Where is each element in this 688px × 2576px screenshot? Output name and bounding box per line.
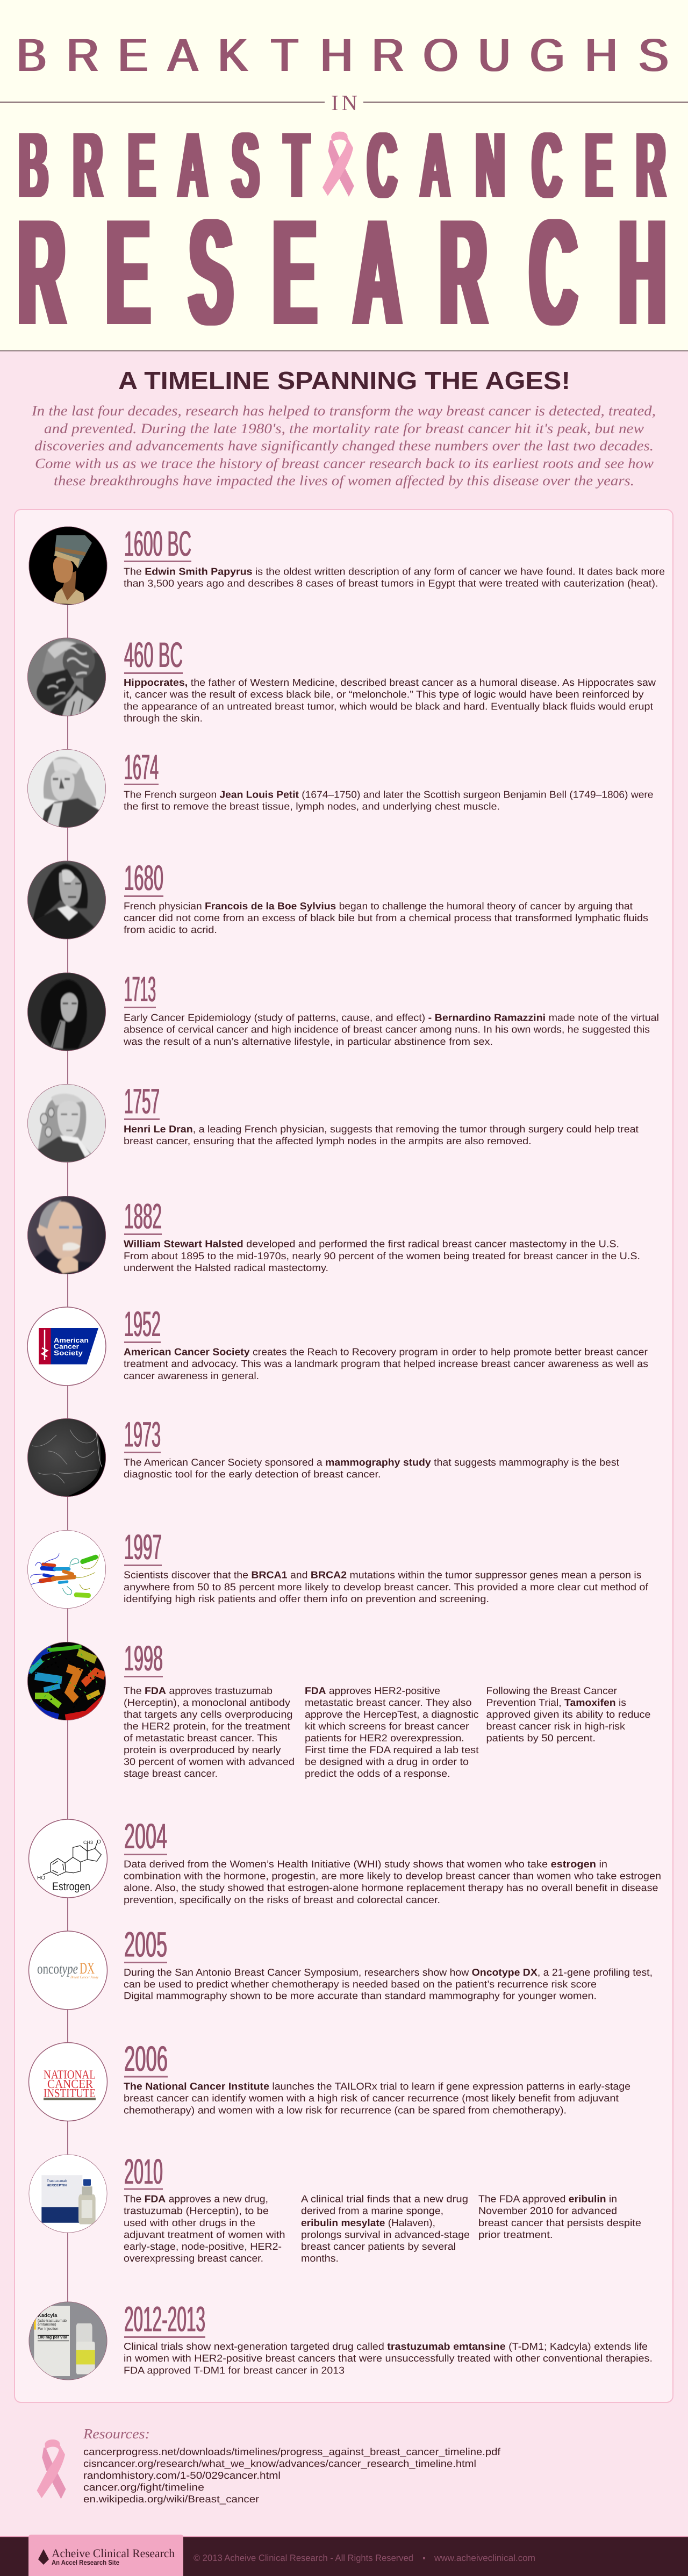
molecule labels: CH3 — [83, 1840, 93, 1845]
text column 1: The FDA approves trastuzumab — [124, 1685, 273, 1696]
underline — [124, 672, 183, 674]
entry: 1997 — [27, 1527, 649, 1609]
text column 3: The FDA approved eribulin in — [478, 2193, 617, 2205]
entry: 1757: 1757 — [124, 1081, 160, 1121]
bullet — [423, 2557, 425, 2559]
text column 3 — [486, 1685, 650, 1743]
box label: Trastuzumab — [47, 2179, 67, 2183]
text block — [124, 788, 654, 812]
text column 3: approved given its ability to reduce — [486, 1709, 650, 1720]
entry: 2012-2013: 2012-2013 — [124, 2299, 205, 2339]
timeline connector line — [67, 605, 68, 2302]
icon: American Cancer Society logo: Cancer — [54, 1343, 79, 1350]
text block: from acidic to acrid. — [124, 924, 217, 935]
text block: The Edwin Smith Papyrus is the oldest written description of any form of cancer we have found. It dates back more — [124, 565, 665, 577]
underline — [124, 1233, 162, 1235]
text block: French physician Francois de la Boe Sylvius began to challenge the humoral theory of cancer by arguing that — [124, 900, 633, 912]
text column 2: eribulin mesylate (Halaven), — [301, 2217, 435, 2228]
icon: National Cancer Institute logo: CANCER — [47, 2077, 94, 2091]
entry: 1674 — [27, 747, 654, 830]
entry: 1973 — [27, 1415, 619, 1497]
text column 2: metastatic breast cancer. They also — [305, 1697, 472, 1708]
text block — [124, 2341, 653, 2376]
entry: 2012-2013 — [28, 2299, 653, 2381]
icon: Jean Louis Petit portrait — [27, 749, 106, 830]
box label: For Injection — [38, 2327, 59, 2331]
icon: Bernardino Ramazzini portrait — [27, 972, 106, 1051]
icon: National Cancer Institute logo: INSTITUTE — [44, 2086, 96, 2100]
panel: timeline — [15, 510, 673, 2402]
text column 1: early-stage, node-positive, HER2- — [124, 2241, 282, 2252]
icon: Francois de la Boe Sylvius portrait — [27, 860, 106, 943]
text column 1: protein is overproduced by nearly — [124, 1744, 281, 1755]
icon: National Cancer Institute logo: NATIONAL — [44, 2068, 96, 2081]
text column 1 — [124, 2193, 285, 2264]
icon: HER2 molecular model — [27, 1641, 106, 1721]
text column 1: adjuvant treatment of women with — [124, 2229, 285, 2240]
text column 2: breast cancer patients by several — [301, 2241, 456, 2252]
entry: 1997: 1997 — [124, 1527, 162, 1567]
text column 2: FDA approves HER2-positive — [305, 1685, 440, 1696]
underline — [124, 1341, 161, 1343]
text block — [124, 1123, 639, 1146]
underline — [124, 1962, 167, 1963]
entry: 1757 — [27, 1081, 639, 1163]
text column 2: prolongs survival in advanced-stage — [301, 2229, 470, 2240]
icon: mammogram — [27, 1418, 108, 1497]
text block — [124, 1456, 619, 1480]
text block — [123, 1011, 659, 1047]
icon: pink ribbon in title — [322, 132, 354, 197]
text column 1: overexpressing breast cancer. — [124, 2252, 263, 2264]
icon: Oncotype DX logo: oncotype — [37, 1961, 78, 1977]
text block: During the San Antonio Breast Cancer Symposium, researchers show how Oncotype DX , a 21-gene profiling test, — [124, 1967, 653, 1978]
resource links: en.wikipedia.org/wiki/Breast_cancer — [83, 2493, 259, 2505]
text column 3: Following the Breast Cancer — [486, 1685, 617, 1696]
text block — [124, 1967, 653, 2001]
text block: was the result of a nun’s alternative lifestyle, in particular abstinence from sex. — [123, 1036, 493, 1047]
text block: American Cancer Society creates the Reach to Recovery program in order to help promote better breast cancer — [124, 1346, 648, 1358]
intro paragraph: In the last four decades, research has helped to transform the way breast cancer is detected, treated, — [31, 403, 656, 419]
entry: 1600 BC — [28, 523, 665, 605]
title: in, with rule lines: IN — [331, 90, 357, 115]
box label: HERCEPTIN — [47, 2184, 67, 2187]
text block: The American Cancer Society sponsored a mammography study that suggests mammography is the best — [124, 1456, 619, 1468]
text block: underwent the Halsted radical mastectomy. — [124, 1262, 328, 1273]
text block — [124, 565, 665, 589]
icon: Henri Le Dran portrait — [27, 1084, 106, 1163]
text block — [124, 1569, 649, 1604]
text column 1: 30 percent of women with advanced — [124, 1756, 295, 1767]
text column 2: predict the odds of a response. — [305, 1768, 450, 1779]
intro paragraph — [31, 403, 656, 489]
molecule labels: O — [97, 1839, 101, 1845]
text column 1: stage breast cancer. — [124, 1768, 218, 1779]
intro paragraph: Come with us as we trace the history of breast cancer research back to its earliest roots and see how — [35, 455, 654, 471]
text column 2: be designed with a drug in order to — [305, 1756, 469, 1767]
entry: 1713 — [27, 969, 659, 1051]
text block: in women with HER2-positive breast cancers that were unsuccessfully treated with other conventional therapies. — [124, 2352, 653, 2364]
text column 2: months. — [301, 2252, 339, 2264]
intro paragraph: and prevented. During the late 1980's, the mortality rate for breast cancer hit it's peak, but new — [44, 420, 644, 436]
text block: it, cancer was the result of excess black bile, or “melonchole.” This type of logic would have been reinforced by — [124, 688, 644, 700]
icon: Kadcyla box and vial — [28, 2301, 108, 2381]
text block: chemotherapy) and women with a low risk for recurrence (can be spared from chemotherapy). — [124, 2105, 567, 2115]
resource links: cancerprogress.net/downloads/timelines/progress_against_breast_cancer_timeline.pdf — [83, 2446, 501, 2457]
entry: 2005 — [29, 1924, 653, 2010]
text column 1 — [124, 1685, 295, 1779]
text column 3: prior treatment. — [478, 2229, 553, 2240]
text column 1: (Herceptin), a monoclonal antibody — [124, 1697, 291, 1708]
underline — [124, 2076, 168, 2078]
panel: title header — [0, 0, 688, 356]
text block: can be used to predict whether chemotherapy is needed based on the patient’s recurrence risk score — [124, 1978, 597, 1990]
icon: BRCA protein structure — [27, 1530, 106, 1609]
entry: 1998: 1998 — [124, 1638, 163, 1678]
icon: Hippocrates engraving — [27, 637, 109, 717]
box label — [47, 2179, 67, 2186]
resource links: randomhistory.com/1-50/029cancer.html — [83, 2470, 281, 2481]
heading: a timeline spanning the ages: A TIMELINE SPANNING THE AGES! — [118, 367, 570, 394]
text block: than 3,500 years ago and describes 8 cases of breast tumors in Egypt that were treated with cauterization (heat). — [124, 578, 658, 589]
text block: Scientists discover that the BRCA1 and BRCA2 mutations within the tumor suppressor genes mean a person is — [124, 1569, 642, 1581]
text block: cancer did not come from an excess of black bile but from a chemical process that transformed lymphatic fluids — [124, 912, 648, 923]
entry: 460 BC — [27, 635, 656, 724]
icon: American Cancer Society logo — [27, 1307, 106, 1386]
text block: Data derived from the Women’s Health Initiative (WHI) study shows that women who take estrogen in — [124, 1859, 607, 1869]
text column 1: of metastatic breast cancer. This — [124, 1732, 277, 1743]
panel: resources — [37, 2426, 501, 2505]
text block: treatment and advocacy. This was a landmark program that helped increase breast cancer awareness as well as — [124, 1358, 648, 1369]
text block: identifying high risk patients and offer them info on prevention and screening. — [124, 1593, 489, 1604]
text block: breast cancer, ensuring that the affected lymph nodes in the armpits are also removed. — [124, 1135, 532, 1146]
underline — [124, 561, 191, 562]
footer — [0, 2535, 688, 2576]
text column 2: patients for HER2 overexpression. — [305, 1732, 464, 1743]
resource links: cancer.org/fight/timeline — [83, 2481, 204, 2493]
text column 2 — [301, 2193, 470, 2264]
resources heading: Resources: — [83, 2426, 150, 2442]
text column 1: used with other drugs in the — [124, 2217, 255, 2228]
text block: The French surgeon Jean Louis Petit (1674–1750) and later the Scottish surgeon Benjamin Bell (1749–1806) were — [124, 788, 654, 800]
underline — [124, 784, 159, 785]
year: 2004 — [124, 1816, 167, 1856]
text column 2: A clinical trial finds that a new drug — [301, 2193, 468, 2205]
entry: 2010: 2010 — [124, 2151, 163, 2191]
text block: absence of cervical cancer and high incidence of breast cancer among nuns. In his own words, he suggested this — [124, 1024, 650, 1035]
text block: FDA approved T-DM1 for breast cancer in 2013 — [124, 2365, 345, 2376]
website: www.acheiveclinical.com — [434, 2553, 535, 2563]
box label: 100 mg per vial — [38, 2335, 67, 2340]
text block: through the skin. — [124, 713, 203, 724]
underline — [124, 2336, 205, 2338]
entry: 1952 — [27, 1304, 648, 1386]
text column 2: derived from a marine sponge, — [301, 2205, 443, 2216]
text column 1: the HER2 protein, for the treatment — [124, 1720, 290, 1732]
icon: American Cancer Society logo: American — [54, 1337, 89, 1344]
title: Research: RESEARCH — [18, 189, 666, 356]
text column 3: November 2010 for advanced — [478, 2205, 617, 2216]
underline — [124, 1118, 160, 1120]
text column 3: breast cancer that persists despite — [478, 2217, 641, 2228]
text block: Digital mammography shown to be more accurate than standard mammography for younger women. — [124, 1990, 597, 2001]
icon: American Cancer Society logo: Society — [54, 1349, 83, 1357]
entry: 460 BC: 460 BC — [124, 635, 183, 675]
text column 1: that targets any cells overproducing — [124, 1709, 292, 1720]
resource links — [83, 2446, 501, 2505]
text block: Henri Le Dran , a leading French physician, suggests that removing the tumor through surgery could help treat — [124, 1123, 639, 1135]
text column 2: kit which screens for breast cancer — [305, 1720, 469, 1732]
logo tab: An Accel Research Site — [52, 2559, 119, 2566]
copyright: © 2013 Acheive Clinical Research - All Rights Reserved — [194, 2553, 413, 2563]
entry: 2004 — [29, 1816, 661, 1905]
intro paragraph: discoveries and advancements have significantly changed these numbers over the last two decades. — [34, 437, 654, 454]
text block — [124, 1238, 640, 1273]
title: Breast Cancer: BREAST CANCER — [19, 113, 665, 217]
molecule labels: HO — [37, 1875, 45, 1881]
title: Breakthroughs: BREAKTHROUGHS — [17, 30, 669, 81]
entry: 1600 BC: 1600 BC — [124, 523, 191, 563]
logo tab — [28, 2535, 183, 2576]
text block: the appearance of an untreated breast tumor, which would be black and hard. Eventually black fluids would erupt — [124, 700, 653, 712]
icon: pink ribbon — [37, 2439, 66, 2499]
entry: 1713: 1713 — [124, 969, 156, 1009]
logo tab: Acheive Clinical Research — [52, 2546, 175, 2560]
text block: anywhere from 50 to 85 percent more likely to develop breast cancer. This provided a more clear cut method of — [124, 1581, 649, 1592]
entry: 1680: 1680 — [124, 858, 163, 898]
text block: Clinical trials show next-generation targeted drug called trastuzumab emtansine (T-DM1; Kadcyla) extends life — [124, 2341, 648, 2352]
entry: 1952: 1952 — [124, 1304, 161, 1344]
text block: the first to remove the breast tissue, lymph nodes, and underlying chest muscle. — [124, 801, 500, 812]
entry: 1674: 1674 — [124, 747, 159, 787]
entry: 1680 — [27, 858, 648, 943]
text block — [124, 1859, 661, 1905]
entry: 1882: 1882 — [124, 1196, 162, 1236]
text block: The National Cancer Institute launches the TAILORx trial to learn if gene expression patterns in early-stage — [124, 2080, 630, 2092]
text block — [124, 677, 656, 724]
underline — [124, 1676, 163, 1677]
text block: breast cancer can identify women with a high risk of cancer recurrence (most likely benefit from adjuvant — [124, 2092, 619, 2104]
text column 3: breast cancer risk in high-risk — [486, 1720, 626, 1732]
text block: combination with the hormone, progestin, are more likely to develop breast cancer than women who take estrogen — [124, 1870, 661, 1882]
underline — [124, 1007, 156, 1008]
icon: Herceptin box and vial — [29, 2154, 108, 2233]
box label: Kadcyla — [38, 2313, 58, 2319]
underline — [124, 1854, 167, 1855]
icon: estrogen molecule — [29, 1819, 108, 1898]
icon: logo diamond — [38, 2549, 49, 2565]
box label: emtansine) — [38, 2322, 56, 2327]
text column 1: The FDA approves a new drug, — [124, 2193, 268, 2205]
entry: 1973: 1973 — [124, 1415, 161, 1454]
year: 2006 — [124, 2039, 168, 2078]
text column 1: trastuzumab (Herceptin), to be — [124, 2205, 269, 2216]
resource links: cisncancer.org/research/what_we_know/advances/cancer_research_timeline.html — [83, 2458, 476, 2469]
text block: cancer awareness in general. — [124, 1370, 259, 1381]
molecule labels — [37, 1839, 101, 1893]
text column 3: Prevention Trial, Tamoxifen is — [486, 1697, 626, 1708]
underline — [124, 1452, 161, 1453]
icon: National Cancer Institute logo — [29, 2042, 108, 2121]
entry: 1882 — [27, 1195, 640, 1276]
entry: 2010 — [29, 2151, 641, 2264]
entry: 2006 — [29, 2039, 630, 2121]
text block — [124, 2080, 630, 2115]
underline — [124, 1565, 162, 1566]
text block: diagnostic tool for the early detection of breast cancer. — [124, 1468, 381, 1480]
text block: Hippocrates, the father of Western Medicine, described breast cancer as a humoral disease. As Hippocrates saw — [124, 677, 656, 688]
icon: Oncotype DX logo: DX — [80, 1960, 95, 1977]
underline — [124, 2188, 163, 2190]
text block: prevention, specifically on the risks of breast and colorectal cancer. — [124, 1894, 440, 1905]
text column 2: approve the HercepTest, a diagnostic — [305, 1709, 479, 1720]
icon: William Stewart Halsted portrait — [27, 1195, 106, 1276]
text block: William Stewart Halsted developed and performed the first radical breast cancer mastectomy in the U.S. — [124, 1238, 619, 1250]
text block: alone. Also, the study showed that estrogen-alone hormone replacement therapy has no overall benefit in disease — [124, 1882, 658, 1893]
text column 2: First time the FDA required a lab test — [305, 1744, 479, 1755]
icon: Oncotype DX logo: Breast Cancer Assay — [70, 1975, 99, 1979]
text block: Early Cancer Epidemiology (study of patterns, cause, and effect) - Bernardino Ramazzini made note of the virtual — [124, 1011, 659, 1023]
intro paragraph: these breakthroughs have impacted the lives of women affected by this disease over the years. — [54, 472, 634, 489]
text block: From about 1895 to the mid-1970s, nearly 90 percent of the women being treated for breast cancer in the U.S. — [124, 1250, 640, 1261]
text column 3 — [478, 2193, 641, 2240]
box label — [38, 2313, 67, 2340]
entry: 1998 — [27, 1638, 650, 1779]
text block — [124, 900, 648, 935]
text block — [124, 1346, 648, 1381]
underline — [124, 895, 163, 897]
text column 2 — [305, 1685, 479, 1779]
molecule labels: Estrogen — [52, 1881, 90, 1893]
icon: Nefertiti bust — [28, 526, 108, 605]
box label: (ado-trastuzumab — [38, 2319, 67, 2323]
icon: Oncotype DX logo — [29, 1931, 108, 2010]
text column 3: patients by 50 percent. — [486, 1732, 596, 1743]
year: 2005 — [124, 1924, 167, 1964]
